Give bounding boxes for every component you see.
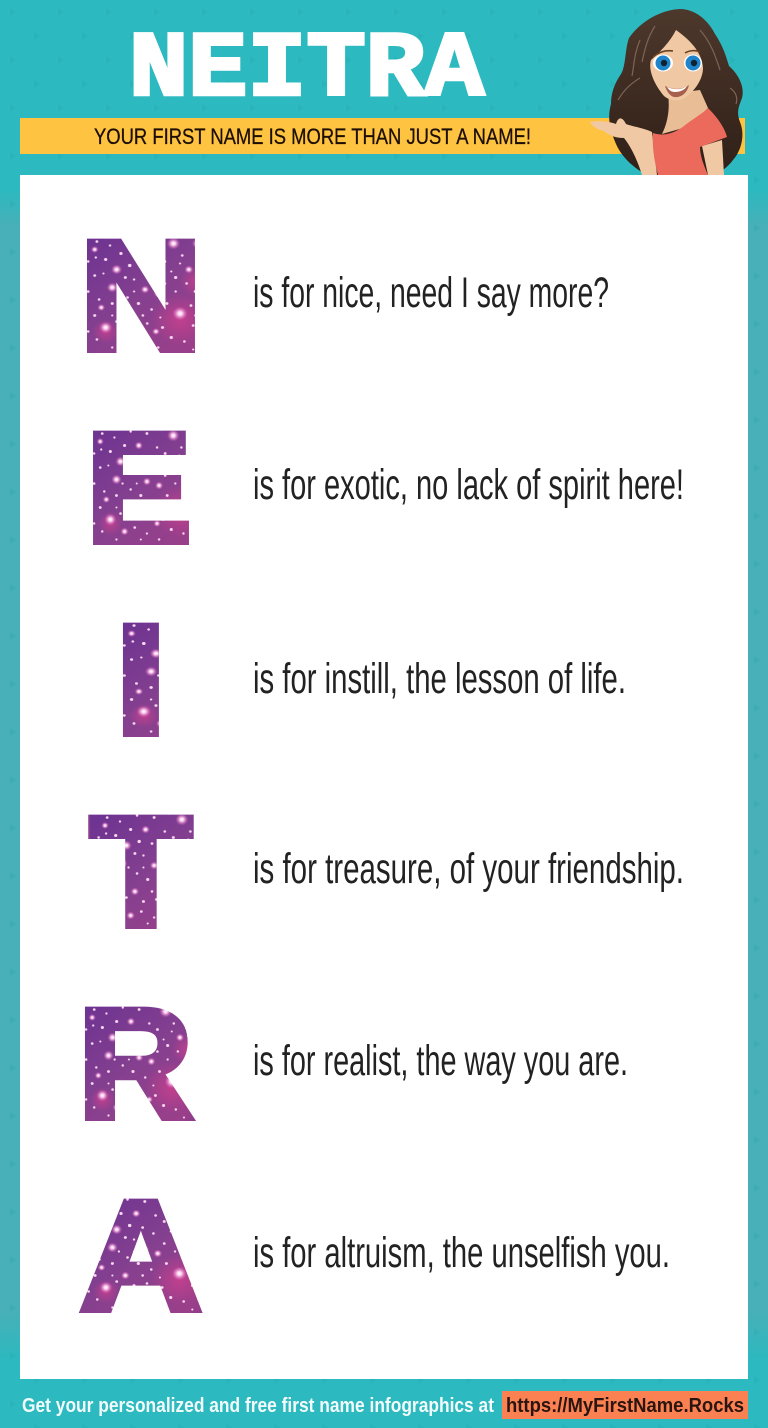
letter A: A <box>80 1169 202 1343</box>
letter T row <box>90 785 684 959</box>
tagline banner: YOUR FIRST NAME IS MORE THAN JUST A NAME! <box>94 124 531 149</box>
mouth <box>665 85 689 97</box>
letter R: R <box>78 977 193 1151</box>
right eye <box>684 54 702 72</box>
illustration: cartoon woman <box>590 9 743 175</box>
letter I: I <box>114 592 167 767</box>
left eye <box>653 54 673 72</box>
hair <box>609 9 743 175</box>
hair highlights <box>618 26 737 104</box>
letter E: E <box>86 402 192 575</box>
title: NEITRA <box>129 18 485 122</box>
neck <box>662 90 708 134</box>
letter N: N <box>79 208 203 383</box>
content panel <box>20 175 748 1379</box>
right arm <box>702 140 724 175</box>
letter N row <box>79 208 609 383</box>
face <box>650 30 703 100</box>
eyebrows <box>653 51 700 57</box>
letter A row <box>80 1169 670 1343</box>
left arm and hand <box>590 118 657 175</box>
shirt <box>653 108 727 175</box>
tagline banner <box>20 118 745 154</box>
letter I row <box>114 592 626 767</box>
footer <box>22 1391 748 1419</box>
letter E row <box>86 402 684 575</box>
footer text: Get your personalized and free first name infographics at <box>22 1395 494 1417</box>
url badge: https://MyFirstName.Rocks <box>506 1395 744 1417</box>
letter T: T <box>90 785 192 959</box>
letter R row <box>78 977 628 1151</box>
